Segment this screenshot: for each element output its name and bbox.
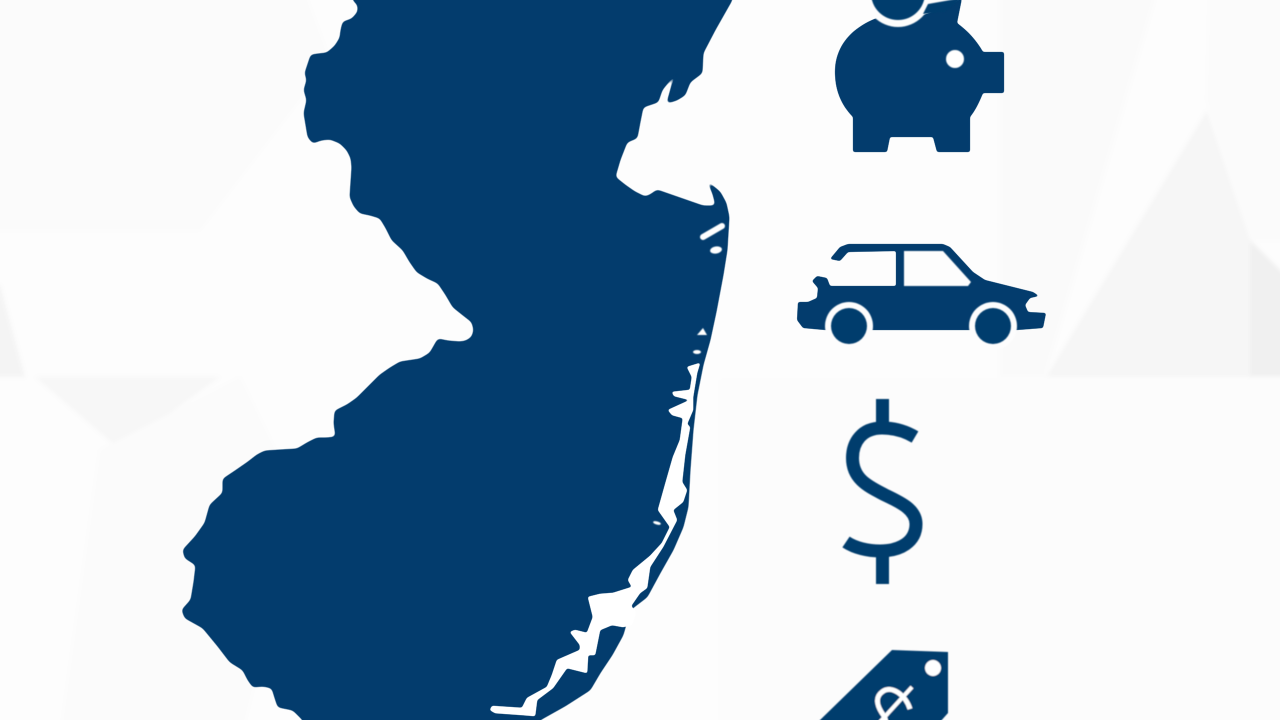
icon: dollar sign bbox=[846, 399, 916, 584]
icon: price tag bbox=[818, 650, 948, 720]
islets: white bay specks bbox=[653, 226, 723, 526]
icon: car bbox=[797, 244, 1046, 350]
map: New Jersey silhouette bbox=[182, 0, 732, 720]
state outline bbox=[182, 0, 732, 720]
icon: piggy bank bbox=[835, 0, 1004, 152]
lagoon: barrier island bays bbox=[490, 363, 700, 716]
